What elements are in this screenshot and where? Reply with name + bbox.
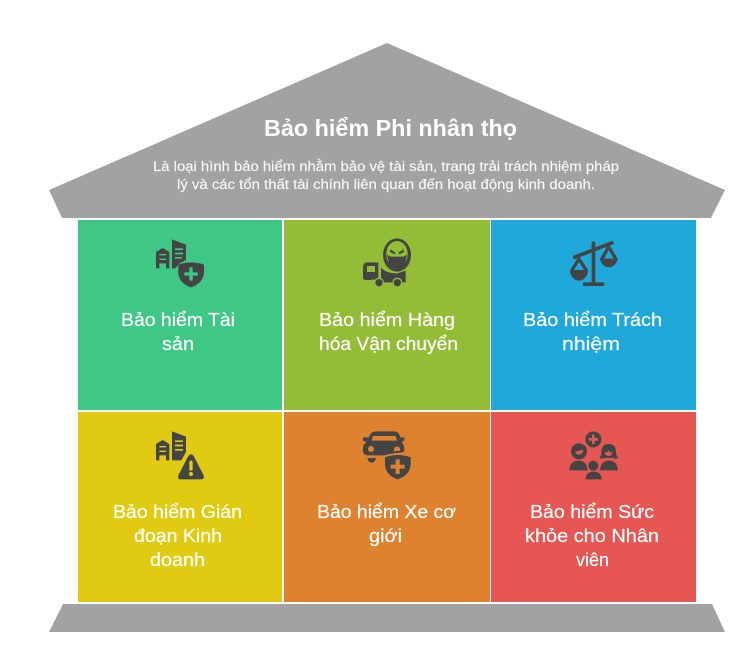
- label: hóa Vận chuyển: [319, 334, 458, 354]
- label: [319, 310, 458, 354]
- icon: scales: [570, 241, 618, 286]
- description: [153, 159, 619, 192]
- roof panel: [49, 43, 725, 218]
- title: Bảo hiểm Phi nhân thọ: [264, 115, 517, 141]
- label: sản: [162, 334, 194, 354]
- label: Bảo hiểm Xe cơ: [317, 502, 456, 522]
- icon: car with shield: [363, 431, 411, 479]
- panel: property insurance: [78, 220, 282, 410]
- label: doanh: [150, 550, 205, 570]
- label: Bảo hiểm Gián: [113, 502, 242, 522]
- label: nhiệm: [562, 334, 620, 354]
- label: giới: [369, 526, 402, 546]
- panel: motor insurance: [284, 412, 490, 602]
- icon: truck with masked face: [363, 238, 411, 288]
- label: [523, 310, 662, 354]
- label: viên: [576, 550, 609, 570]
- label: Bảo hiểm Hàng: [319, 310, 455, 330]
- icon: people with medical cross: [569, 431, 619, 479]
- description: lý và các tổn thất tài chính liên quan đến hoạt động kinh doanh.: [177, 177, 595, 192]
- panel: employee health insurance: [491, 412, 696, 602]
- panel: business interruption insurance: [78, 412, 282, 602]
- label: đoạn Kinh: [134, 526, 222, 546]
- label: khỏe cho Nhân: [525, 526, 659, 546]
- label: [121, 310, 235, 354]
- icon: buildings with warning: [156, 431, 204, 479]
- label: [525, 502, 659, 570]
- base panel: [49, 604, 725, 632]
- label: [317, 502, 456, 546]
- panel: cargo insurance: [284, 220, 490, 410]
- icon: buildings with shield: [156, 239, 204, 287]
- label: Bảo hiểm Sức: [530, 502, 654, 522]
- description: Là loại hình bảo hiểm nhằm bảo vệ tài sản, trang trải trách nhiệm pháp: [153, 159, 619, 174]
- panel: liability insurance: [491, 220, 696, 410]
- label: Bảo hiểm Trách: [523, 310, 662, 330]
- label: [113, 502, 242, 570]
- label: Bảo hiểm Tài: [121, 310, 235, 330]
